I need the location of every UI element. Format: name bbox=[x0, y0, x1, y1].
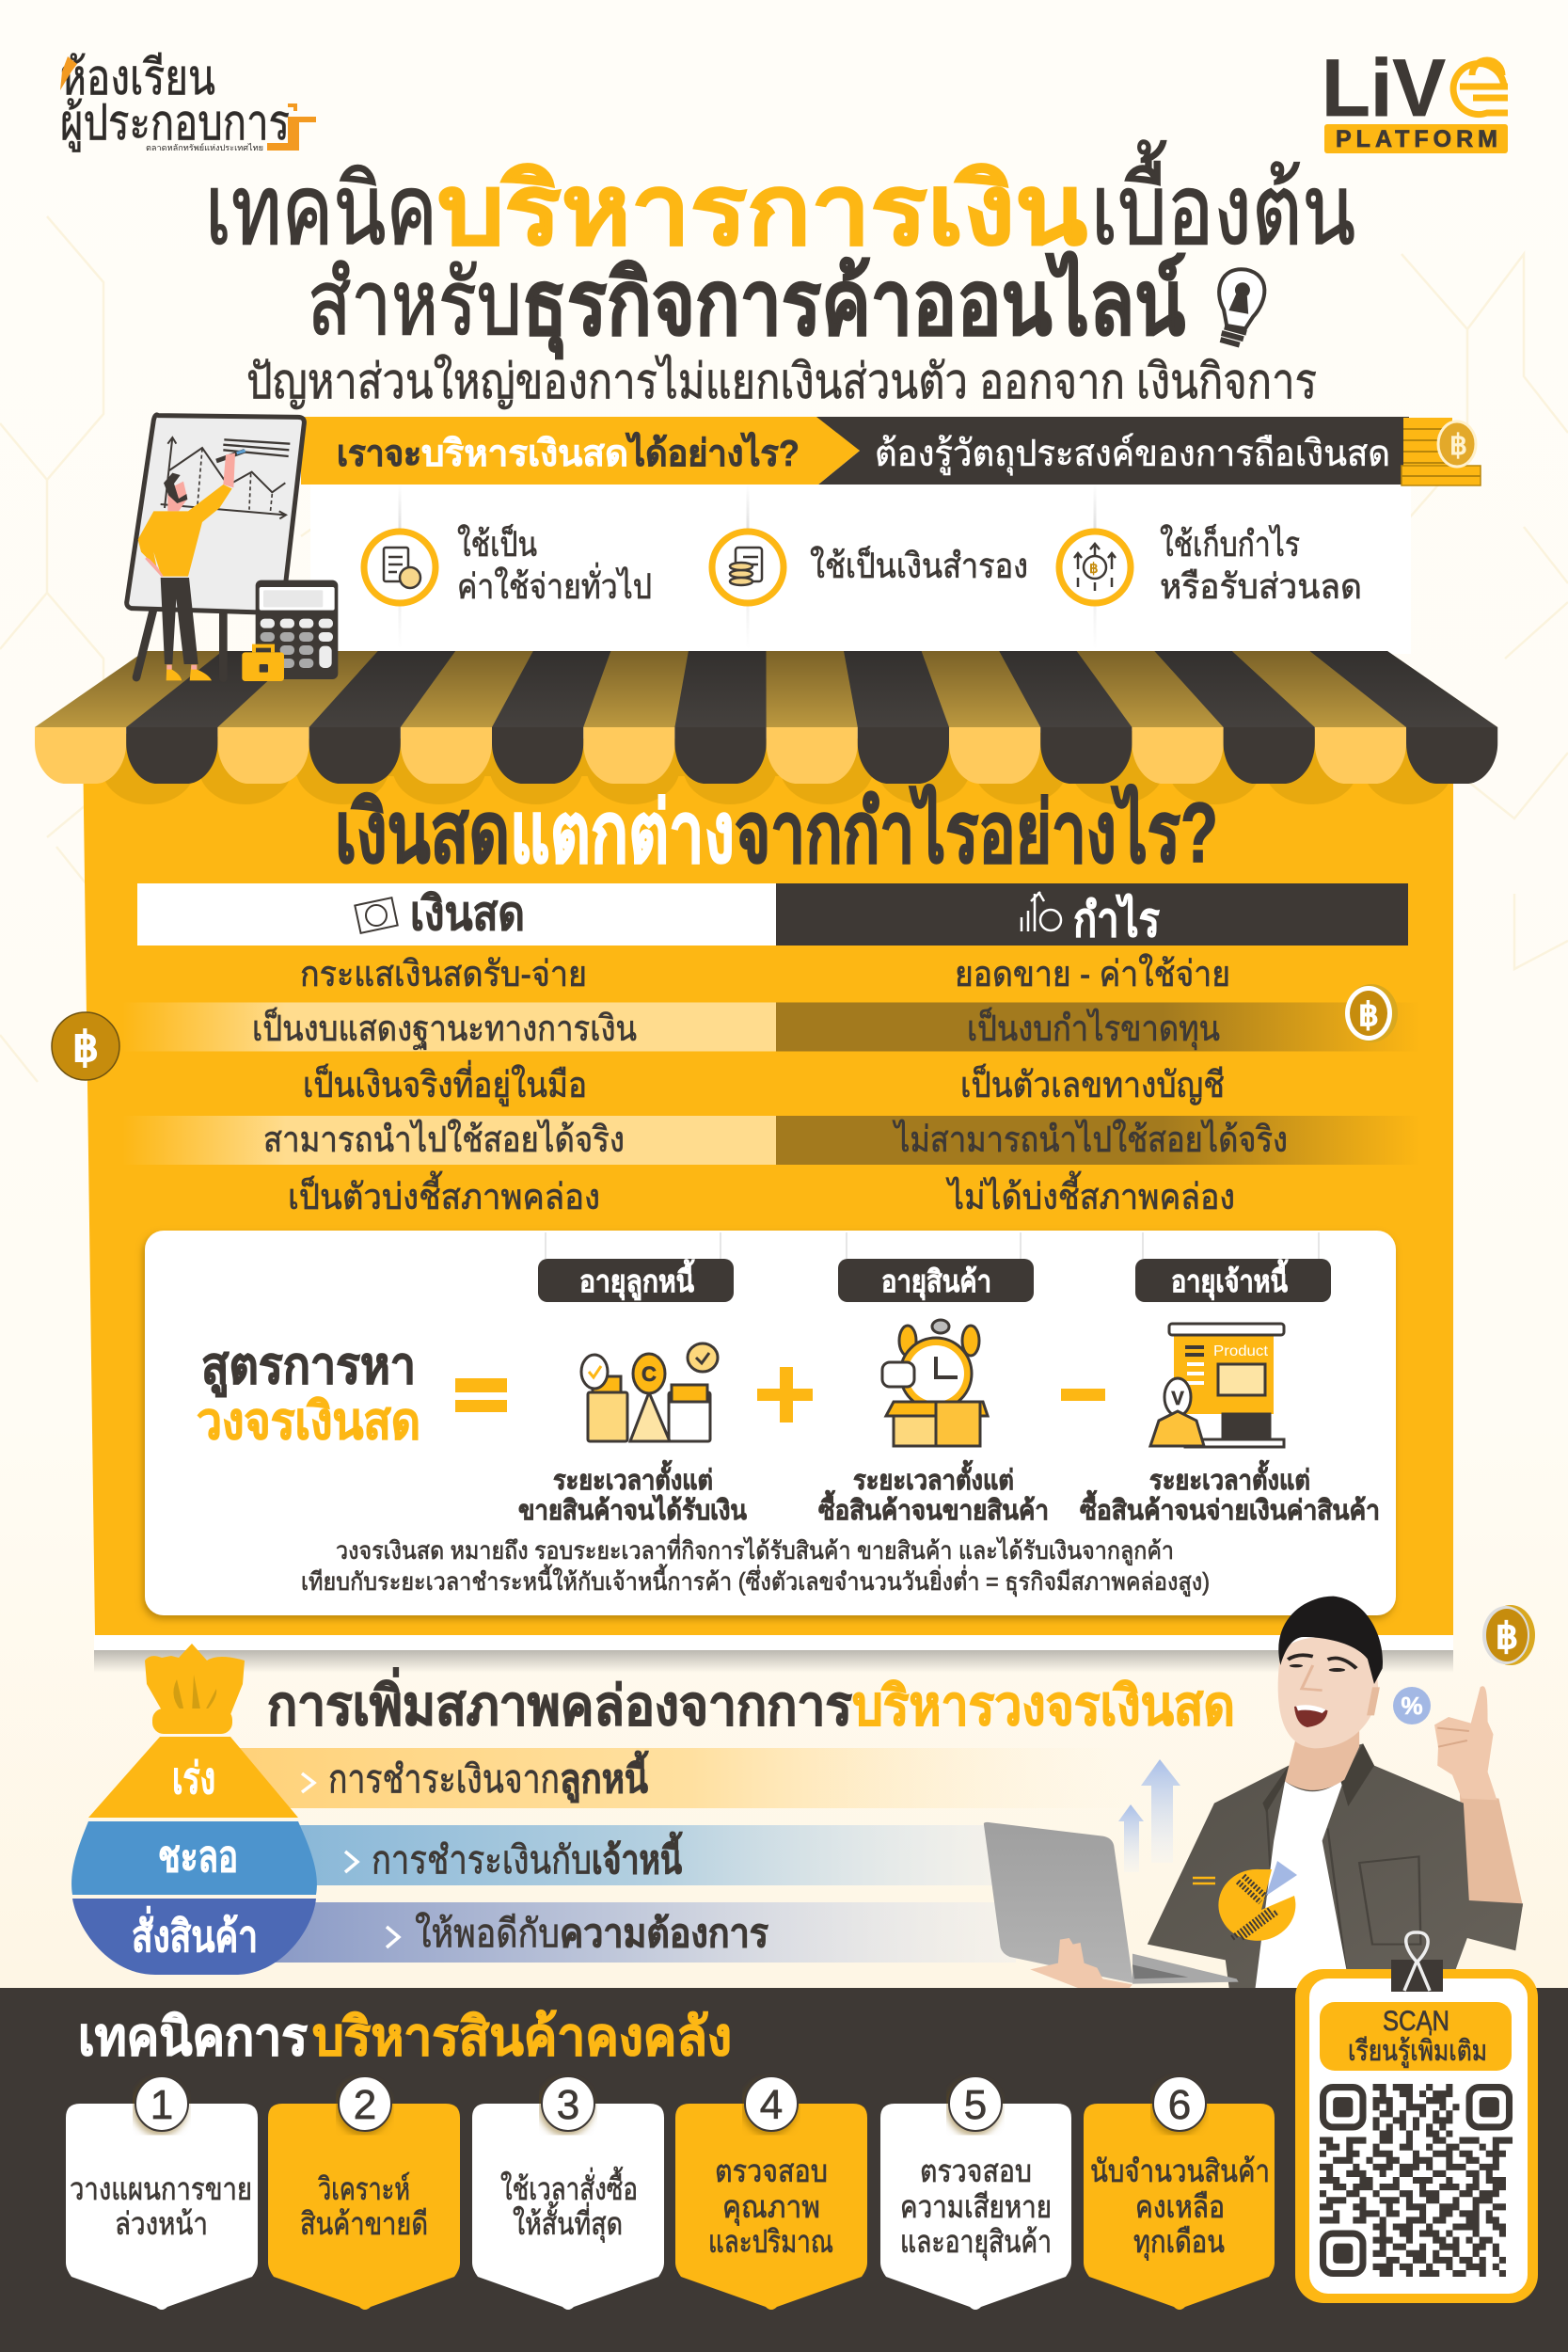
icon: coin stack bbox=[1402, 418, 1481, 485]
title bbox=[205, 140, 1355, 359]
heading: บริหารสินค้าคงคลัง bbox=[312, 2007, 732, 2066]
text: profit: หรือรับส่วนลด bbox=[1160, 567, 1362, 606]
icon: profit: ฿ bbox=[1089, 561, 1099, 577]
face bbox=[1278, 1637, 1378, 1748]
money bag: ชะลอ bbox=[158, 1832, 238, 1881]
background hexagon pattern bbox=[0, 216, 1568, 1082]
heading: cash vs profit bbox=[335, 785, 1218, 881]
icon: coin stack: ฿ bbox=[1449, 430, 1467, 461]
icon: coin left bbox=[52, 1012, 119, 1080]
card 6: 6 bbox=[1168, 2082, 1191, 2128]
column: cash: เป็นตัวบ่งชี้สภาพคล่อง bbox=[288, 1170, 600, 1217]
QR code bbox=[1320, 2088, 1513, 2273]
icon: coin right bbox=[1345, 984, 1398, 1042]
icon: customer and boxes bbox=[581, 1343, 718, 1441]
logo: classroom for entrepreneurs: ผู้ประกอบการ bbox=[60, 96, 290, 152]
card 6: ทุกเดือน bbox=[1133, 2224, 1225, 2261]
card 5: ความเสียหาย bbox=[900, 2189, 1052, 2224]
card 2 bbox=[268, 2076, 460, 2310]
icon: clock and box bbox=[882, 1320, 988, 1446]
column: cash: สามารถนำไปใช้สอยได้จริง bbox=[263, 1120, 625, 1160]
tag: inventory days bbox=[838, 1259, 1034, 1302]
definition text: วงจรเงินสด หมายถึง รอบระยะเวลาที่กิจการได้รับสินค้า ขายสินค้า และได้รับเงินจากลูกค้า bbox=[336, 1534, 1174, 1565]
icon: coin left: ฿ bbox=[72, 1025, 99, 1071]
card 3 bbox=[472, 2076, 664, 2310]
title: ธุรกิจการค้าออนไลน์ bbox=[522, 251, 1185, 359]
column: cash: กระแสเงินสดรับ-จ่าย bbox=[300, 955, 587, 994]
card 2: 2 bbox=[354, 2082, 376, 2128]
column: cash bbox=[252, 955, 637, 1217]
card 1 bbox=[66, 2076, 258, 2310]
scan label bbox=[1320, 2002, 1512, 2071]
title: สำหรับ bbox=[308, 253, 522, 354]
purposes row bbox=[364, 485, 1362, 649]
awning bbox=[35, 651, 1497, 784]
card 2: สินค้าขายดี bbox=[300, 2206, 428, 2241]
logo: classroom for entrepreneurs: ตลาดหลักทรัพย์แห่งประเทศไทย bbox=[146, 142, 263, 152]
binder clip bbox=[1391, 1932, 1443, 1992]
definition text: เทียบกับระยะเวลาชำระหนี้ให้กับเจ้าหนี้การค้า (ซึ่งตัวเลขจำนวนวันยิ่งต่ำ = ธุรกิจมีสภาพคล่องสูง) bbox=[301, 1564, 1210, 1597]
shirt bbox=[1148, 1743, 1523, 1989]
subtitle: ปัญหาส่วนใหญ่ของการไม่แยกเงินส่วนตัว ออกจาก เงินกิจการ bbox=[246, 354, 1317, 409]
panel: QR scan card bbox=[1295, 1932, 1538, 2303]
icon: supplier presentation bbox=[1150, 1324, 1284, 1447]
heading: cash vs profit: จากกำไรอย่างไร? bbox=[735, 785, 1218, 881]
raised forearm and hand bbox=[1460, 1794, 1523, 1907]
captions: ระยะเวลาตั้งแต่ bbox=[853, 1459, 1014, 1496]
bar: order goods bbox=[273, 1902, 1016, 1963]
heading: liquidity bbox=[267, 1667, 1235, 1737]
header: profit bbox=[776, 883, 1408, 946]
panel: cash cycle formula bbox=[145, 1231, 1396, 1615]
header: cash bbox=[137, 883, 776, 946]
icon: customer and boxes: C bbox=[641, 1362, 657, 1386]
logo: classroom for entrepreneurs: ห้องเรียน bbox=[60, 51, 215, 105]
scan label: SCAN bbox=[1383, 2006, 1449, 2037]
text: general expenses: ใช้เป็น bbox=[457, 522, 537, 564]
column: profit: เป็นงบกำไรขาดทุน bbox=[967, 1007, 1220, 1050]
card 3: 3 bbox=[557, 2082, 579, 2128]
header: profit: กำไร bbox=[1073, 893, 1160, 946]
column: profit: ไม่สามารถนำไปใช้สอยได้จริง bbox=[892, 1120, 1288, 1160]
formula label: สูตรการหา bbox=[201, 1338, 416, 1397]
captions: ซื้อสินค้าจนจ่ายเงินค่าสินค้า bbox=[1080, 1489, 1380, 1526]
eyes, brows, nose, mouth bbox=[1288, 1655, 1356, 1668]
icon: pie chart bbox=[1193, 1861, 1297, 1941]
card 5: และอายุสินค้า bbox=[900, 2224, 1052, 2261]
column: profit: ยอดขาย - ค่าใช้จ่าย bbox=[955, 954, 1230, 994]
laptop bbox=[1132, 1954, 1239, 1984]
equals bbox=[455, 1378, 507, 1412]
plus bbox=[757, 1367, 813, 1422]
logo: classroom for entrepreneurs bbox=[60, 51, 316, 152]
card 6: คงเหลือ bbox=[1135, 2189, 1225, 2224]
banner: เราจะ bbox=[337, 434, 421, 474]
logo: LIVE platform: LiV bbox=[1322, 43, 1446, 134]
bar: delay payables: เจ้าหนี้ bbox=[592, 1832, 683, 1882]
bar: order goods: ให้พอดีกับ bbox=[415, 1912, 560, 1955]
money bag bbox=[71, 1644, 317, 1975]
icon: coin right of shop bbox=[1482, 1605, 1535, 1665]
bar: speed up receivables: การชำระเงินจาก bbox=[328, 1757, 560, 1801]
captions: ขายสินค้าจนได้รับเงิน bbox=[518, 1494, 747, 1526]
hair bbox=[1278, 1597, 1383, 1684]
comparison table bbox=[122, 883, 1420, 1217]
bar: delay payables bbox=[300, 1825, 1015, 1885]
logo: LIVE platform bbox=[1322, 43, 1508, 153]
captions bbox=[518, 1459, 1380, 1526]
bar: order goods: ความต้องการ bbox=[560, 1912, 768, 1955]
card 6: นับจำนวนสินค้า bbox=[1090, 2153, 1270, 2188]
card 2: วิเคราะห์ bbox=[318, 2171, 410, 2206]
bar: speed up receivables bbox=[240, 1748, 1143, 1808]
icon: general expenses bbox=[364, 532, 436, 603]
tag: payable days: อายุเจ้าหนี้ bbox=[1171, 1259, 1289, 1301]
icon: coin right of shop: ฿ bbox=[1496, 1617, 1518, 1657]
card 3: ให้สั้นที่สุด bbox=[513, 2201, 623, 2243]
heading: เทคนิคการ bbox=[78, 2007, 308, 2066]
icon: percent badge bbox=[1393, 1687, 1431, 1724]
t-shirt bbox=[1255, 1778, 1350, 1989]
tag: payable days bbox=[1135, 1259, 1331, 1302]
tag: inventory days: อายุสินค้า bbox=[881, 1264, 991, 1301]
card 5: 5 bbox=[964, 2082, 987, 2128]
definition text bbox=[301, 1534, 1210, 1597]
card 1: 1 bbox=[150, 2082, 173, 2128]
bar: delay payables: การชำระเงินกับ bbox=[372, 1838, 592, 1882]
money bag: เร่ง bbox=[172, 1754, 215, 1803]
icon: light bulb bbox=[1211, 265, 1268, 347]
column: profit: เป็นตัวเลขทางบัญชี bbox=[960, 1063, 1225, 1105]
neck bbox=[1285, 1722, 1359, 1790]
icon: percent badge: % bbox=[1401, 1692, 1423, 1720]
title: เทคนิค bbox=[205, 156, 437, 265]
column: cash: เป็นงบแสดงฐานะทางการเงิน bbox=[252, 1007, 637, 1050]
heading: cash vs profit: แตกต่าง bbox=[510, 787, 735, 881]
icon: up arrows bbox=[1118, 1759, 1180, 1872]
icon: reserve bbox=[712, 532, 784, 603]
icon: profit bbox=[1059, 532, 1131, 603]
title: บริหารการเงิน bbox=[437, 156, 1087, 265]
text: general expenses bbox=[457, 522, 652, 606]
header: cash: เงินสด bbox=[410, 887, 525, 940]
icon: supplier presentation: V bbox=[1171, 1389, 1184, 1409]
heading bbox=[78, 2007, 732, 2066]
banner: บริหารเงินสด bbox=[421, 434, 628, 474]
icon: coin right: ฿ bbox=[1358, 997, 1379, 1033]
tag: receivable days: อายุลูกหนี้ bbox=[579, 1259, 695, 1301]
column: cash: เป็นเงินจริงที่อยู่ในมือ bbox=[303, 1060, 587, 1106]
white band behind banner items bbox=[310, 485, 1411, 654]
captions: ระยะเวลาตั้งแต่ bbox=[1149, 1459, 1310, 1496]
text: general expenses: ค่าใช้จ่ายทั่วไป bbox=[457, 562, 652, 606]
heading: liquidity: บริหารวงจรเงินสด bbox=[852, 1676, 1235, 1737]
card 4: 4 bbox=[760, 2082, 783, 2128]
heading: cash vs profit: เงินสด bbox=[335, 787, 510, 881]
card 4 bbox=[675, 2076, 867, 2310]
card 4: คุณภาพ bbox=[722, 2189, 820, 2226]
card 5 bbox=[880, 2076, 1071, 2310]
logo: LIVE platform: PLATFORM bbox=[1336, 126, 1497, 152]
card 1: ล่วงหน้า bbox=[115, 2206, 208, 2241]
bar: speed up receivables: ลูกหนี้ bbox=[560, 1751, 649, 1804]
text: profit bbox=[1160, 522, 1362, 606]
awning shadow bbox=[102, 729, 1453, 804]
text: reserve: ใช้เป็นเงินสำรอง bbox=[810, 544, 1028, 585]
banner: ได้อย่างไร? bbox=[625, 432, 800, 474]
panel: inventory techniques bbox=[0, 1988, 1568, 2352]
minus bbox=[1061, 1389, 1105, 1401]
text: profit: ใช้เก็บกำไร bbox=[1160, 522, 1300, 564]
formula label: วงจรเงินสด bbox=[197, 1393, 420, 1450]
card 3: ใช้เวลาสั่งซื้อ bbox=[500, 2167, 638, 2206]
card 5: ตรวจสอบ bbox=[920, 2153, 1032, 2188]
card 1: วางแผนการขาย bbox=[70, 2171, 252, 2206]
captions: ซื้อสินค้าจนขายสินค้า bbox=[818, 1489, 1049, 1526]
card 4: และปริมาณ bbox=[708, 2224, 833, 2259]
photo: man with laptop bbox=[984, 1597, 1523, 1989]
card 6 bbox=[1084, 2076, 1275, 2310]
hand on laptop bbox=[1030, 1938, 1132, 1989]
heading: liquidity: การเพิ่มสภาพคล่องจากการ bbox=[267, 1667, 852, 1737]
column: profit bbox=[892, 954, 1288, 1217]
formula label bbox=[197, 1338, 420, 1450]
illustration: man at chart board with calculator bbox=[127, 415, 338, 681]
column: profit: ไม่ได้บ่งชี้สภาพคล่อง bbox=[945, 1170, 1235, 1217]
panel: shop body bbox=[83, 739, 1453, 1673]
captions: ระยะเวลาตั้งแต่ bbox=[553, 1459, 713, 1496]
title: เบื้องต้น bbox=[1091, 140, 1355, 265]
scan label: เรียนรู้เพิ่มเติม bbox=[1348, 2031, 1487, 2068]
tag: receivable days bbox=[538, 1259, 734, 1302]
card 4: ตรวจสอบ bbox=[715, 2153, 828, 2188]
icon: supplier presentation: Product bbox=[1213, 1343, 1269, 1359]
money bag: สั่งสินค้า bbox=[132, 1906, 258, 1961]
banner bbox=[301, 417, 1409, 485]
banner: ต้องรู้วัตถุประสงค์ของการถือเงินสด bbox=[875, 433, 1390, 476]
